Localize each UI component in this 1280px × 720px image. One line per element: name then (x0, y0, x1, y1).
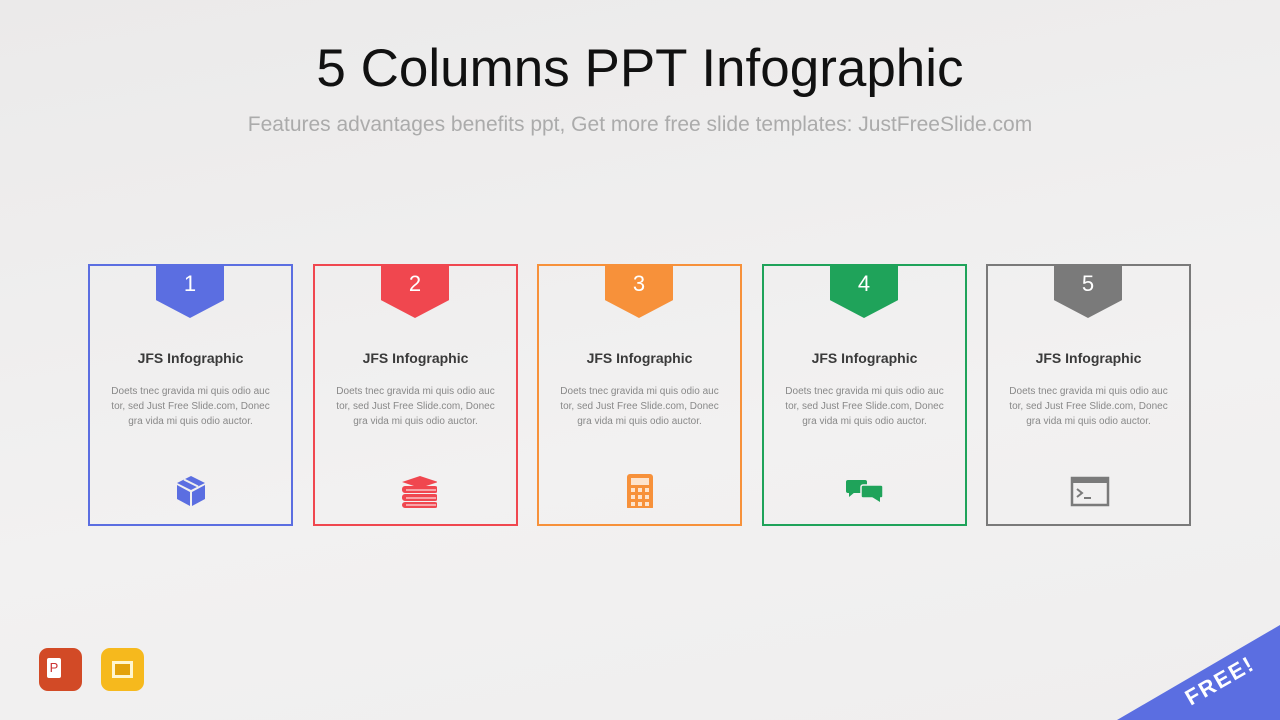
badge 2: 2 (409, 271, 421, 296)
panel: card 4 (762, 264, 967, 526)
subtitle: Features advantages benefits ppt, Get more free slide templates: JustFreeSlide.com (248, 113, 1032, 136)
card body: tor, sed Just Free Slide.com, Donec (1009, 401, 1168, 412)
panel: card 2 (313, 264, 518, 526)
panel: card 3 (537, 264, 742, 526)
panel: card 5 (986, 264, 1191, 526)
card body: tor, sed Just Free Slide.com, Donec (111, 401, 270, 412)
icon: google slides (101, 648, 144, 691)
card body: tor, sed Just Free Slide.com, Donec (785, 401, 944, 412)
card body (785, 386, 944, 427)
card body (111, 386, 270, 427)
card body: Doets tnec gravida mi quis odio auc (336, 386, 495, 397)
card body (560, 386, 719, 427)
card body: tor, sed Just Free Slide.com, Donec (336, 401, 495, 412)
icon: powerpoint: P (50, 660, 58, 675)
badge 4: 4 (858, 271, 870, 296)
card title: JFS Infographic (138, 350, 243, 366)
card body (336, 386, 495, 427)
badge 1: 1 (184, 271, 196, 296)
badge 4 (830, 264, 898, 318)
panel: card 1 (88, 264, 293, 526)
card body: gra vida mi quis odio auctor. (128, 416, 253, 427)
card title: JFS Infographic (587, 350, 692, 366)
card body: gra vida mi quis odio auctor. (577, 416, 702, 427)
badge 3: 3 (633, 271, 645, 296)
card body: gra vida mi quis odio auctor. (802, 416, 927, 427)
card title: JFS Infographic (1036, 350, 1141, 366)
icon: chat (846, 480, 882, 502)
card body: Doets tnec gravida mi quis odio auc (785, 386, 944, 397)
icon: calculator (627, 474, 653, 508)
card body: tor, sed Just Free Slide.com, Donec (560, 401, 719, 412)
card body: Doets tnec gravida mi quis odio auc (111, 386, 270, 397)
card title: JFS Infographic (363, 350, 468, 366)
card body: Doets tnec gravida mi quis odio auc (1009, 386, 1168, 397)
badge 5: 5 (1082, 271, 1094, 296)
badge 3 (605, 264, 673, 318)
icon: terminal (1070, 476, 1110, 506)
badge 1 (156, 264, 224, 318)
card body: gra vida mi quis odio auctor. (353, 416, 478, 427)
badge 5 (1054, 264, 1122, 318)
card body (1009, 386, 1168, 427)
icon: books (402, 476, 437, 508)
title: 5 Columns PPT Infographic (316, 39, 964, 98)
badge 2 (381, 264, 449, 318)
ribbon: free (1117, 625, 1280, 720)
icon: powerpoint (39, 648, 82, 691)
icon: box (177, 476, 205, 506)
card body: Doets tnec gravida mi quis odio auc (560, 386, 719, 397)
card title: JFS Infographic (812, 350, 917, 366)
ribbon: free: FREE! (1181, 651, 1259, 710)
card body: gra vida mi quis odio auctor. (1026, 416, 1151, 427)
